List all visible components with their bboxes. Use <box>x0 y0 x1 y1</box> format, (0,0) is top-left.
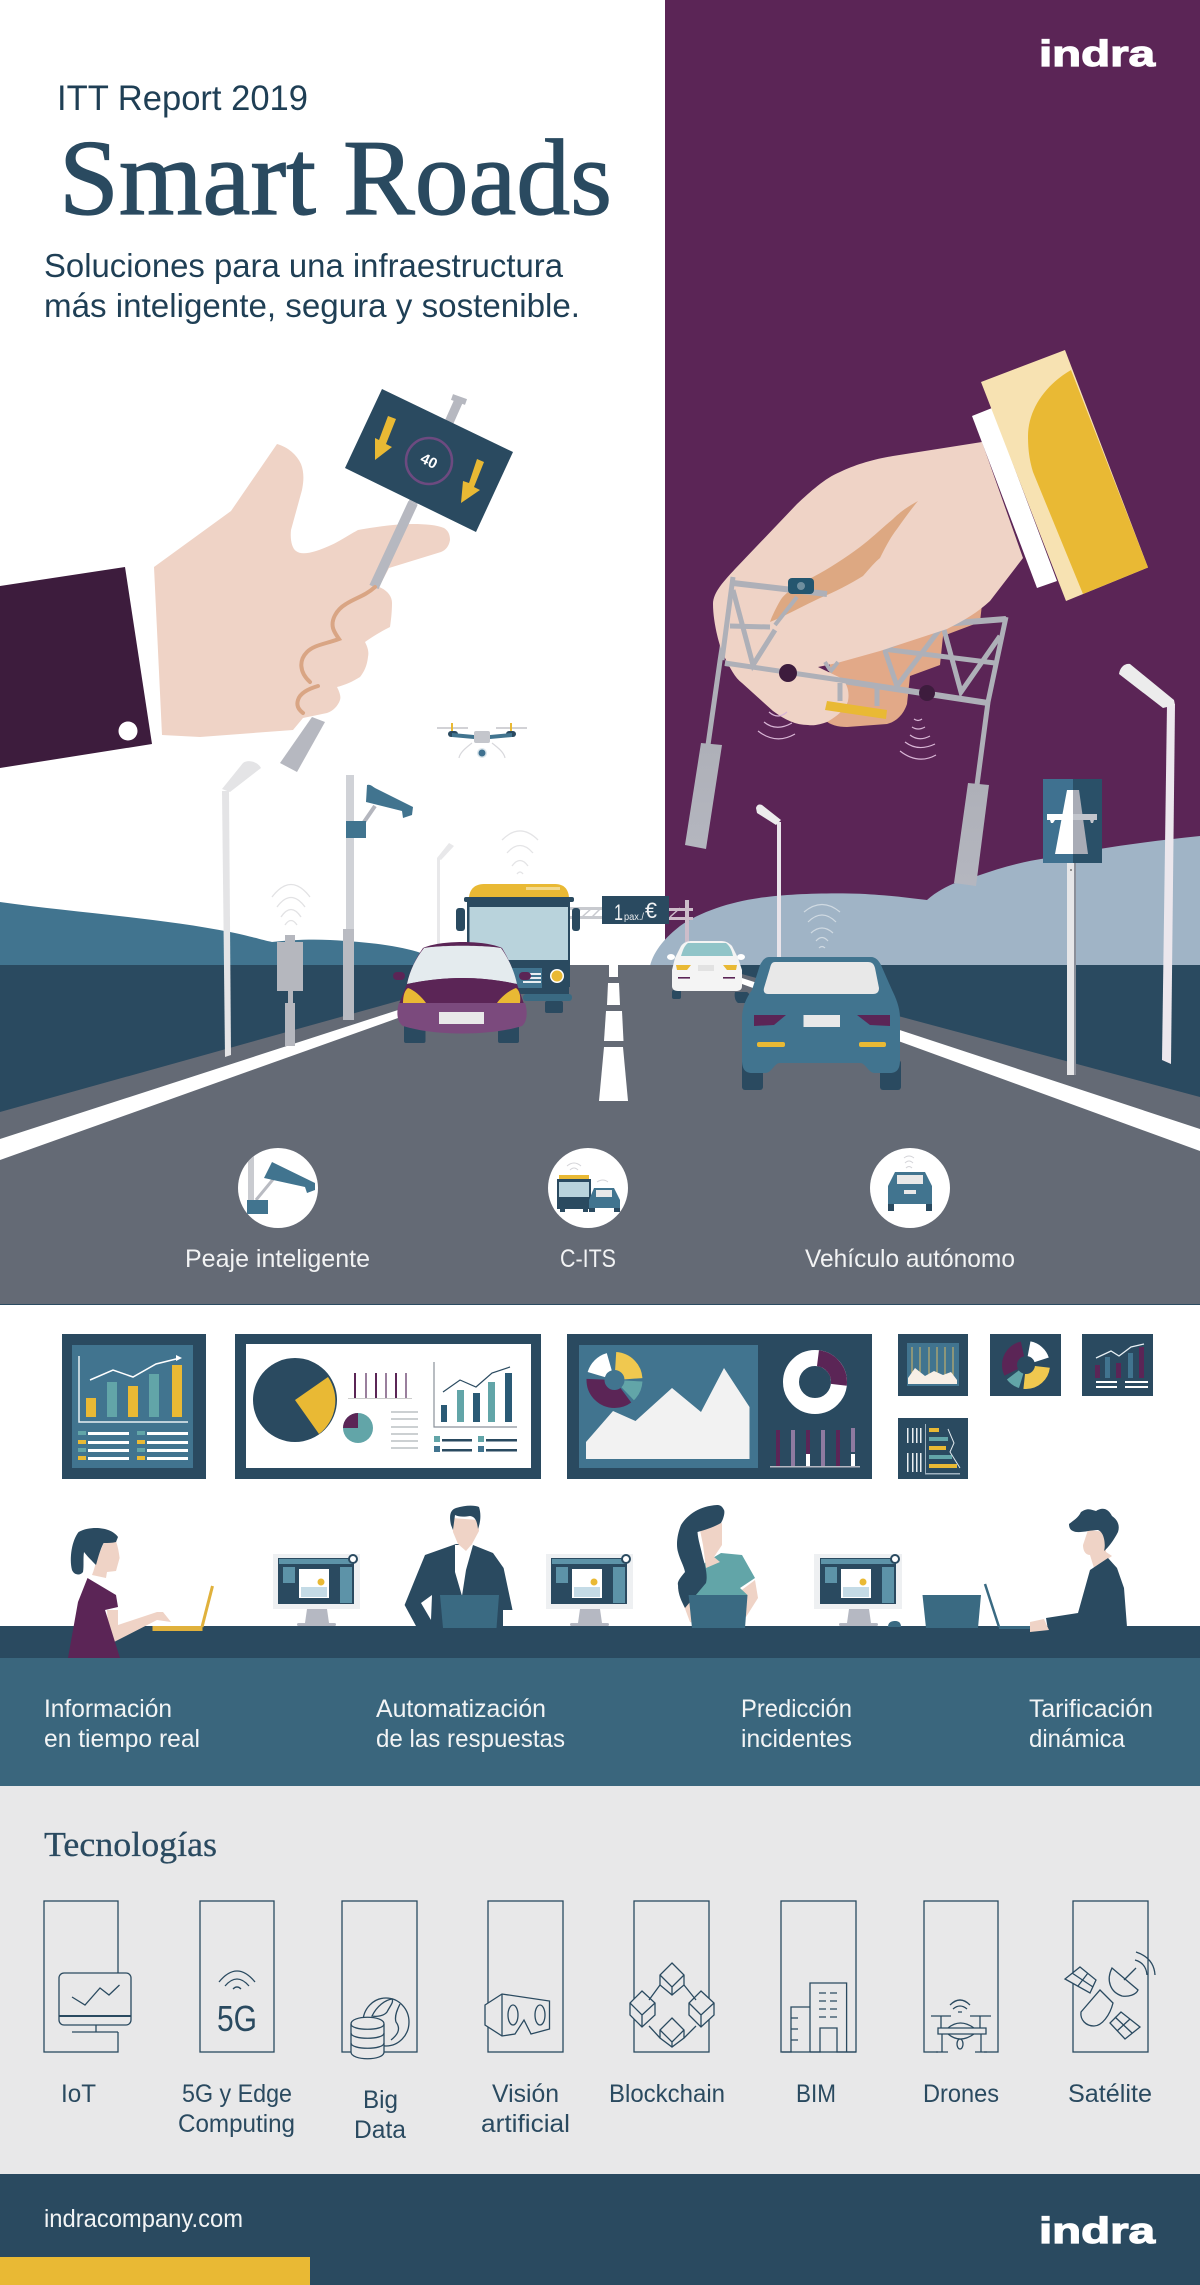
capability labels: incidentes <box>741 1725 852 1753</box>
left hills <box>0 902 445 966</box>
small dashboard 3 <box>1082 1334 1153 1396</box>
left hand holding sign <box>0 389 513 772</box>
person with laptop, purple shirt <box>68 1528 212 1658</box>
bus <box>456 831 580 1013</box>
dashboard 1 <box>62 1334 206 1479</box>
capability labels: en tiempo real <box>44 1725 200 1753</box>
sleeve <box>0 567 152 768</box>
right hills <box>650 836 1200 966</box>
report label: ITT Report 2019 <box>57 79 308 118</box>
capability labels: de las respuestas <box>376 1725 565 1753</box>
finger creases <box>297 587 375 713</box>
gantry over hand <box>722 577 860 701</box>
person standing, suit <box>405 1506 512 1628</box>
monitor 1 <box>273 1554 360 1626</box>
capability labels: Tarificación <box>1029 1695 1153 1723</box>
distant street lamp <box>437 843 454 948</box>
technology labels: Big <box>363 2086 398 2114</box>
technology labels: IoT <box>61 2080 96 2108</box>
monitor 3 <box>814 1554 902 1626</box>
icon: satellite <box>1065 1901 1155 2052</box>
roadside kiosk with signal <box>272 884 310 1046</box>
icon: BIM <box>781 1901 856 2052</box>
street lamp left <box>222 761 261 1057</box>
capability labels: Información <box>44 1695 172 1723</box>
footer <box>0 2174 1200 2285</box>
technology labels: Blockchain <box>609 2080 725 2108</box>
technology labels: artificial <box>481 2110 570 2138</box>
drone <box>437 723 527 758</box>
road labels: Vehículo autónomo <box>805 1245 1015 1273</box>
road labels: Peaje inteligente <box>185 1245 370 1273</box>
street lamp centre right <box>756 804 781 959</box>
road <box>0 965 1200 1304</box>
dashboard 2 <box>235 1334 541 1479</box>
road labels <box>185 1245 1015 1273</box>
capability labels: dinámica <box>1029 1725 1125 1753</box>
small dashboard 2 <box>990 1334 1061 1396</box>
technology labels: 5G y Edge <box>182 2080 292 2108</box>
blue car <box>742 904 901 1090</box>
small dashboard 1 <box>898 1334 968 1396</box>
motorway sign <box>1043 779 1102 1075</box>
subtitle: Soluciones para una infraestructura <box>44 247 564 284</box>
icon: Big Data <box>342 1901 417 2059</box>
street lamp right <box>1119 664 1175 1064</box>
technology labels <box>61 2080 1152 2144</box>
toll gantry with price sign: pax./ <box>624 912 644 923</box>
icon: autonomous vehicle <box>870 1148 950 1228</box>
mouse <box>888 1621 901 1627</box>
logo bottom: indra <box>1039 2210 1156 2251</box>
logo top: indra <box>1039 33 1156 74</box>
desk <box>0 1626 1200 1658</box>
icon: 5G: 5G <box>217 1998 257 2039</box>
technology labels: Drones <box>923 2080 999 2108</box>
technology labels: Computing <box>178 2110 295 2138</box>
person seated, side view <box>985 1509 1127 1632</box>
toll gantry with price sign: 1 <box>614 900 623 925</box>
road edge lines <box>0 978 1200 1160</box>
toll gantry with price sign: € <box>645 898 657 923</box>
technology labels: BIM <box>796 2080 836 2108</box>
dashboard 3 <box>567 1334 872 1479</box>
panel: purple background <box>665 0 1200 966</box>
navy roadside band <box>0 965 1200 1305</box>
icon: C-ITS vehicles <box>548 1148 628 1228</box>
person with long hair <box>677 1505 758 1628</box>
capability labels: Predicción <box>741 1695 852 1723</box>
band: capabilities <box>0 1658 1200 1786</box>
icon: blockchain <box>630 1901 714 2052</box>
subtitle <box>44 247 580 324</box>
technology labels: Data <box>354 2116 406 2144</box>
cuff <box>972 408 1057 588</box>
laptop back <box>922 1595 981 1628</box>
camera pole <box>343 775 413 1020</box>
capability labels: Automatización <box>376 1695 546 1723</box>
road labels: C-ITS <box>560 1245 616 1273</box>
hand <box>713 442 1023 725</box>
icon: computer vision <box>485 1901 563 2052</box>
technologies heading: Tecnologías <box>44 1825 217 1864</box>
toll gantry <box>708 577 1006 785</box>
icon: 5G <box>200 1901 274 2052</box>
technology labels: Satélite <box>1068 2080 1152 2108</box>
panel: technologies <box>0 1786 1200 2174</box>
capability labels <box>44 1695 1153 1753</box>
centre dashes <box>599 965 628 1101</box>
icon: IoT <box>44 1901 131 2052</box>
footer accent <box>0 2257 310 2285</box>
title: Smart Roads <box>59 119 612 238</box>
website: indracompany.com <box>44 2205 243 2233</box>
monitor 2 <box>546 1554 633 1626</box>
white car <box>667 941 750 1003</box>
toll gantry with price sign <box>569 896 693 942</box>
left hand holding sign: 40 <box>417 450 440 473</box>
speed sign <box>345 389 513 532</box>
icon: drone <box>924 1901 998 2055</box>
subtitle: más inteligente, segura y sostenible. <box>44 287 580 324</box>
hand <box>154 444 450 737</box>
purple car <box>393 942 531 1043</box>
right hand with cuff and gantry <box>685 350 1148 886</box>
small dashboard 4 <box>898 1418 968 1479</box>
technology labels: Visión <box>492 2080 559 2108</box>
icon: toll camera <box>238 1148 318 1228</box>
